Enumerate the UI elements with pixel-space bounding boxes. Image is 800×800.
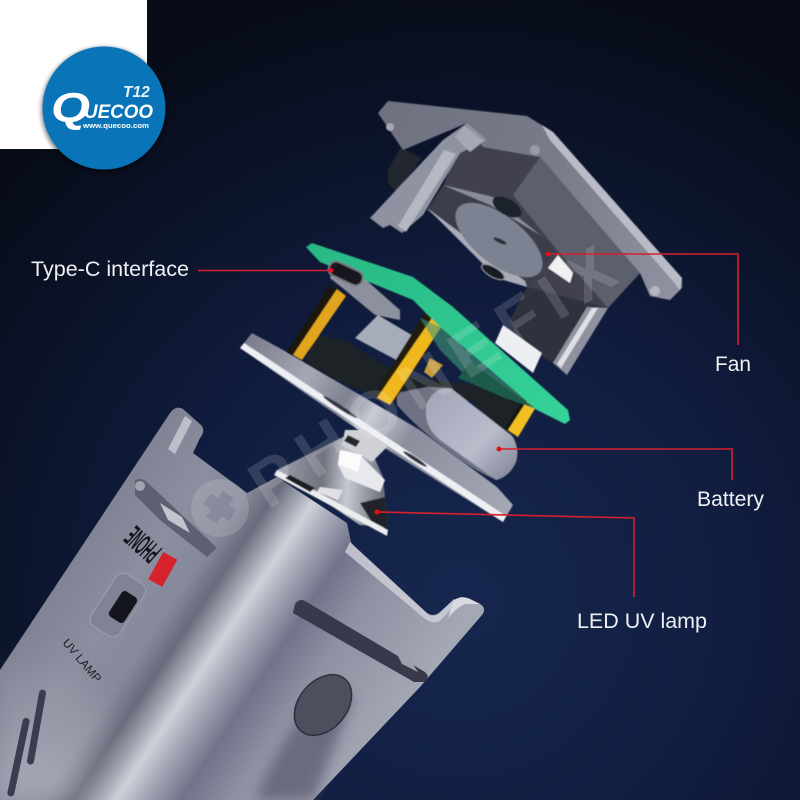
lamp body: PHONE	[119, 520, 168, 568]
fan leg top highlight	[455, 126, 484, 152]
LED label: LED UV lamp	[577, 610, 707, 633]
watermark text: PHONEFIX	[235, 231, 628, 522]
callout: Battery	[496, 446, 764, 511]
switch bezel	[87, 570, 149, 640]
small gold part	[424, 358, 443, 378]
yellow bar back one	[287, 285, 345, 360]
yellow bar front three	[508, 396, 539, 437]
lens dark lower	[360, 497, 388, 527]
lens neck dark stripes	[344, 435, 360, 447]
fan bright edge	[542, 125, 682, 290]
badge url: www.quecoo.com	[82, 121, 149, 130]
lens dark band	[285, 475, 315, 492]
yellow bar front one	[293, 289, 346, 360]
fan frame	[427, 185, 557, 287]
cap ring	[274, 470, 388, 536]
callout: Type-C interface	[31, 258, 334, 281]
lens cone	[277, 437, 388, 527]
LED leader line	[377, 512, 634, 597]
fan wall	[513, 157, 640, 308]
fan dark tail wall	[510, 287, 608, 363]
side slot metal	[160, 503, 190, 533]
watermark screw icon	[180, 468, 260, 548]
type-c port	[326, 259, 365, 288]
lower shadow wave	[255, 685, 352, 800]
battery face	[426, 388, 517, 480]
fan leg highlight	[398, 150, 456, 232]
type-c shell	[330, 262, 400, 320]
grey component block	[355, 315, 420, 362]
watermark	[180, 231, 628, 548]
white fan connector	[548, 255, 573, 283]
notch highlight left	[168, 416, 192, 454]
PCB dark underside window	[458, 362, 535, 408]
PCB underside	[420, 318, 537, 410]
base plate	[240, 333, 513, 522]
lens block	[317, 487, 343, 500]
LED dot	[374, 510, 380, 514]
fan label: Fan	[715, 353, 751, 376]
fan mount hole lower	[479, 261, 507, 283]
UV LAMP label: UV LAMP	[60, 636, 104, 685]
type-c label: Type-C interface	[31, 258, 189, 281]
callout: LED UV lamp	[374, 510, 707, 633]
slot metal end	[395, 650, 418, 672]
side slot screw	[135, 481, 145, 491]
fan inner cavity	[443, 123, 640, 308]
green PCB	[306, 243, 570, 424]
right bracket highlight	[557, 308, 598, 368]
side slot upper	[135, 479, 217, 557]
type-c dot	[328, 268, 334, 273]
fan mount hole upper	[489, 192, 525, 222]
plate top surface	[240, 333, 513, 522]
fan leader line	[548, 254, 738, 345]
fan mount bracket dark	[388, 148, 422, 192]
lens white ridge	[338, 452, 385, 492]
body silhouette	[0, 408, 484, 800]
right hook highlight	[448, 597, 480, 618]
badge UECOO: UECOO	[84, 102, 153, 123]
fan screw right	[650, 286, 660, 296]
right bracket	[553, 307, 608, 375]
dark battery cylinder	[305, 335, 530, 440]
plate bright edge	[240, 343, 506, 522]
switch button	[107, 590, 139, 624]
brand mark red	[148, 552, 177, 587]
vent slot left	[7, 717, 30, 797]
fan hub slot	[493, 236, 507, 246]
fan lower edge	[427, 208, 527, 287]
fan dot	[546, 252, 550, 256]
LED lens	[274, 430, 388, 536]
badge T12: T12	[123, 84, 150, 101]
fan screw left	[386, 123, 394, 131]
battery dot	[496, 446, 502, 452]
lamp body	[0, 408, 484, 800]
white corner panel	[0, 0, 147, 149]
white PCB connector	[495, 325, 542, 373]
lens highlight	[338, 450, 362, 472]
yellow bar front two	[377, 312, 447, 405]
left lower light	[0, 640, 110, 800]
fan assembly	[370, 101, 682, 375]
long side slot	[293, 600, 428, 682]
round button	[283, 664, 363, 746]
battery label: Battery	[697, 488, 764, 511]
fan housing back plate	[378, 101, 682, 300]
lens neck	[342, 430, 388, 462]
vent slot right	[26, 689, 47, 765]
badge Q: Q	[51, 84, 90, 132]
badge shadow	[41, 47, 167, 173]
yellow bar back three	[505, 393, 538, 437]
plate dark slot two	[402, 450, 428, 468]
callout: Fan	[546, 252, 751, 376]
battery metal body	[397, 387, 517, 480]
fan screw top	[530, 145, 540, 155]
badge circle	[42, 46, 166, 170]
plate dark slot one	[322, 394, 358, 420]
yellow bar back two	[377, 308, 447, 400]
right notch bright edge	[345, 542, 456, 622]
fan hub disc	[443, 189, 555, 291]
fan left leg	[370, 123, 487, 233]
type-c leader line	[198, 270, 331, 272]
PCB stack	[287, 243, 570, 480]
battery leader line	[499, 449, 732, 480]
fan frame upper edge	[443, 185, 540, 235]
logo badge	[41, 46, 167, 173]
